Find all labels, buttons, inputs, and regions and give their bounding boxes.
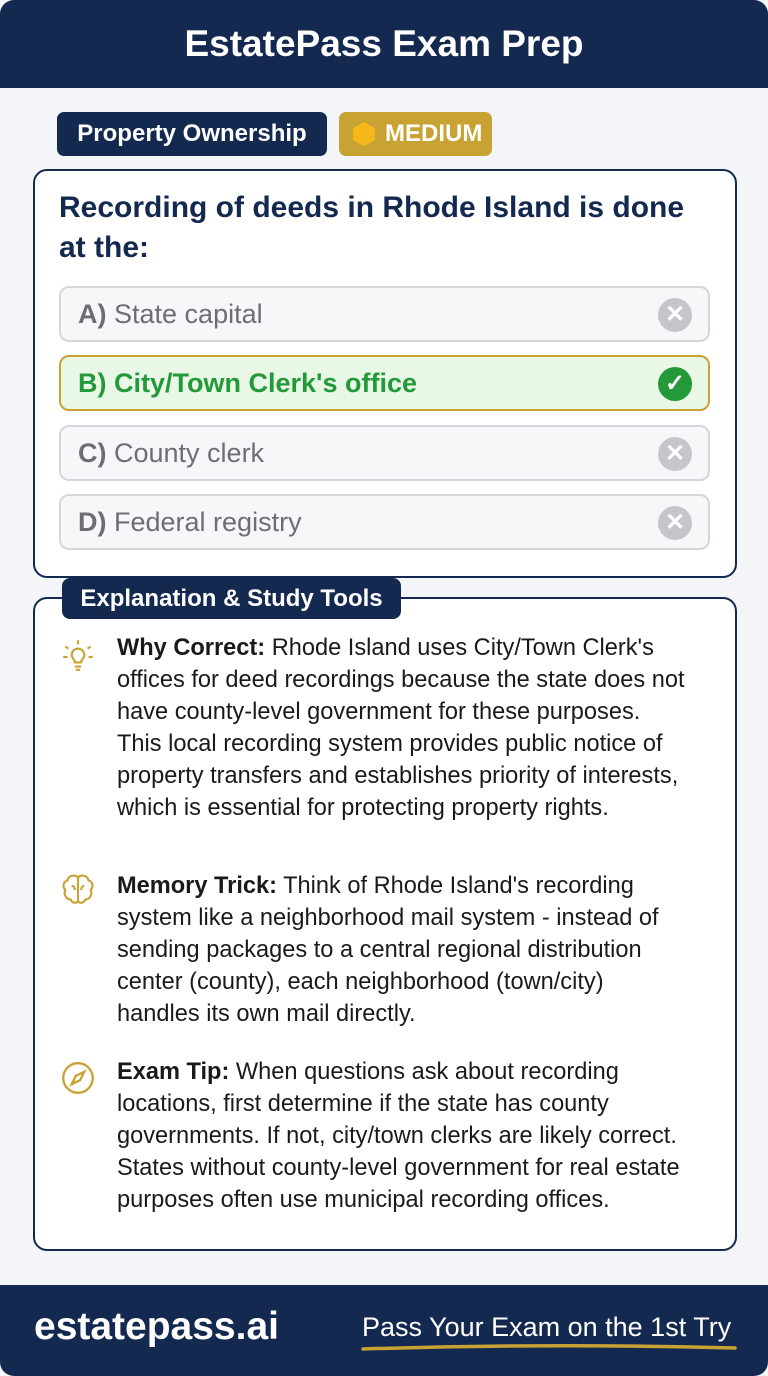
text: exam tip: locations, first determine if the state has county [117,1091,609,1117]
header: EstatePass Exam Prep [184,23,584,64]
text: why correct: have county-level government for these purposes. [117,699,640,725]
icon: brain [62,874,94,904]
option D [59,494,710,550]
tag: category: Property Ownership [77,120,307,147]
option C: C) County clerk [78,438,264,468]
text: why correct: offices for deed recordings because the state does not [117,667,684,693]
text: exam tip: purposes often use municipal recording offices. [117,1187,610,1213]
text: memory trick: center (county), each neighborhood (town/city) [117,969,604,995]
text: why correct [117,635,684,821]
option B correct: ✓ [665,370,685,397]
explanation card [33,597,737,1251]
option A: A) State capital [78,299,263,329]
option C [59,425,710,481]
text: why correct: property transfers and establishes priority of interests, [117,763,678,789]
footer slogan: Pass Your Exam on the 1st Try [362,1312,731,1342]
footer brand: estatepass.ai [34,1305,279,1348]
icon: compass [62,1062,94,1094]
text: why correct: This local recording system provides public notice of [117,731,663,757]
tag: category [57,112,327,156]
text: memory trick: sending packages to a central regional distribution [117,937,642,963]
explanation tab [62,578,401,619]
text: exam tip: Exam Tip: When questions ask about recording [117,1059,619,1085]
question card [33,169,737,578]
option B correct [59,355,710,411]
option A: ✕ [665,301,685,328]
header [0,0,768,88]
text: why correct: which is essential for protecting property rights. [117,795,609,821]
question text: Recording of deeds in Rhode Island is done at the: [59,191,684,264]
option B correct: B) City/Town Clerk's office [78,368,417,398]
footer [0,1285,768,1376]
text: exam tip: States without county-level government for real estate [117,1155,680,1181]
text: memory trick: system like a neighborhood mail system - instead of [117,905,659,931]
text: exam tip [117,1059,680,1213]
option C: ✕ [665,440,685,467]
text: memory trick: Memory Trick: Think of Rhode Island's recording [117,873,634,899]
text: exam tip: governments. If not, city/town clerks are likely correct. [117,1123,677,1149]
text: why correct: Why Correct: Rhode Island uses City/Town Clerk's [117,635,654,661]
option D: D) Federal registry [78,507,302,537]
text: memory trick [117,873,659,1027]
tag: difficulty: MEDIUM [385,120,482,147]
icon: lightbulb [63,640,93,671]
text: memory trick: handles its own mail directly. [117,1001,416,1027]
tag: difficulty [339,112,492,156]
option A [59,286,710,342]
explanation tab: Explanation & Study Tools [80,585,383,612]
option D: ✕ [665,509,685,536]
